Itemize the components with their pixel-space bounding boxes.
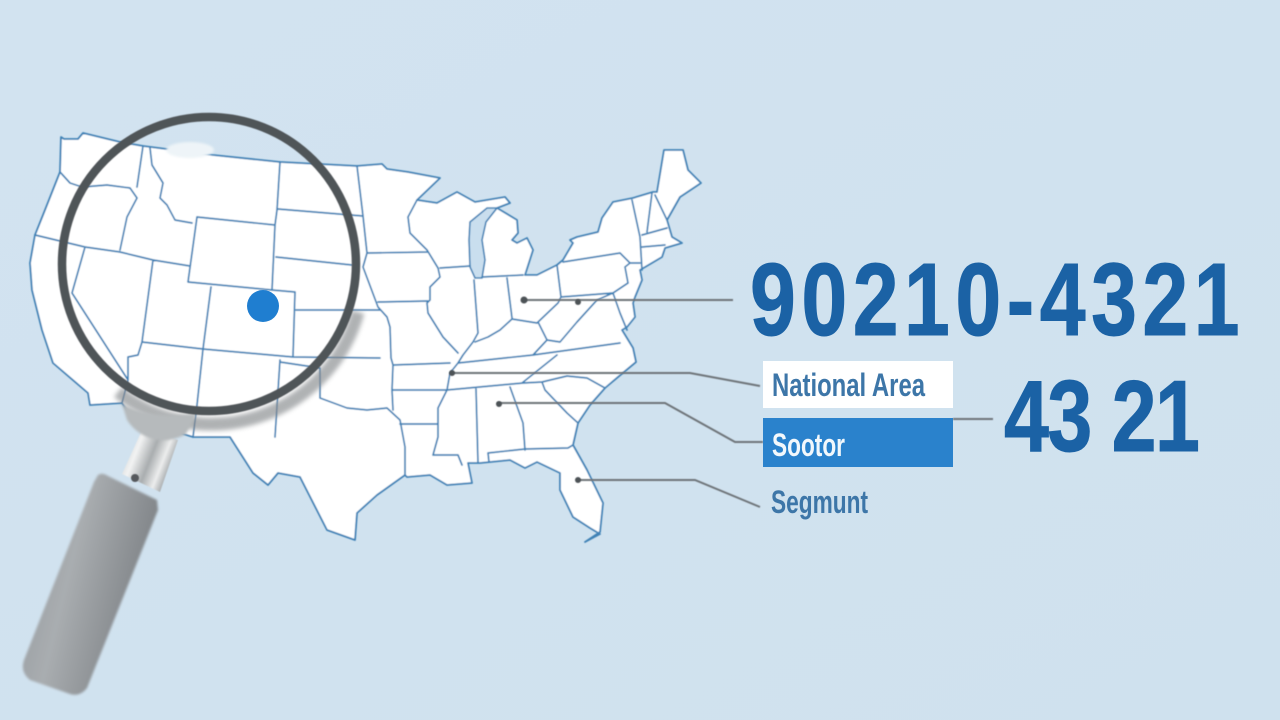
label: Sootor xyxy=(763,418,953,467)
handle neck xyxy=(122,428,178,492)
ZIP code headline: 90210-4321 xyxy=(750,242,1240,357)
leader lines xyxy=(450,300,993,507)
map land outline xyxy=(30,133,701,542)
location marker xyxy=(247,290,279,322)
label: National Area: National Area xyxy=(772,367,925,403)
lens shadow xyxy=(118,312,358,424)
icon: magnifying glass xyxy=(23,117,358,695)
label: National Area xyxy=(763,361,953,408)
handle grip xyxy=(23,474,158,695)
leader dots xyxy=(449,296,581,483)
lens ring xyxy=(62,117,356,411)
label: Segmunt: Segmunt xyxy=(771,484,868,520)
map: United States xyxy=(30,133,701,542)
neck screw xyxy=(131,474,139,482)
lake michigan xyxy=(469,208,497,278)
segment number: 43 21 xyxy=(1004,360,1200,473)
label: Sootor: Sootor xyxy=(772,427,845,463)
lens glare xyxy=(166,142,214,158)
state borders xyxy=(35,146,667,475)
lens ferrule xyxy=(122,404,196,440)
